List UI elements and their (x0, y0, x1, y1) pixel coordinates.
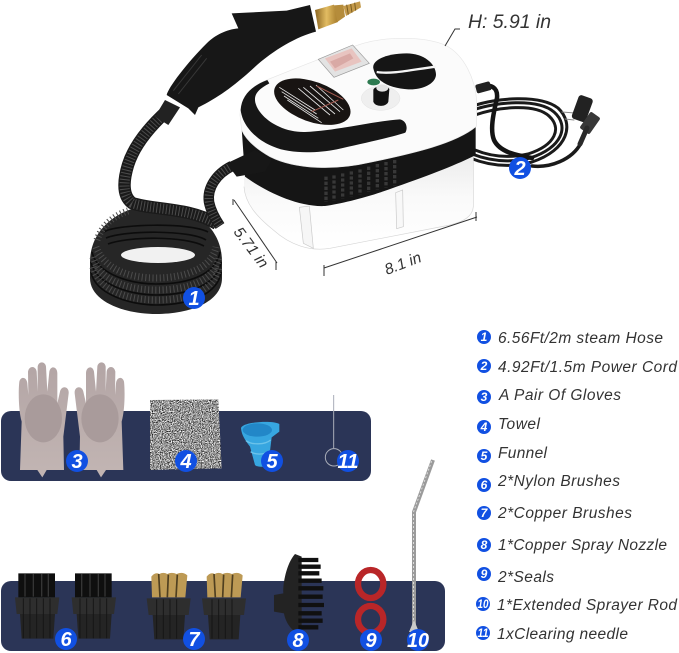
legend item 7: 2*Copper Brushes (497, 505, 632, 522)
icon: pair of gloves (19, 362, 125, 477)
icon: power cord and plug (470, 81, 601, 166)
legend item 9 (477, 567, 554, 586)
badge 6 (55, 628, 77, 651)
badge 4: 4 (179, 451, 192, 473)
badge 9 (360, 629, 382, 652)
badge 5 (261, 450, 283, 473)
badge 2: 2 (513, 158, 526, 180)
legend item 2: 2 (480, 359, 488, 373)
legend item 11: 1xClearing needle (497, 626, 628, 643)
icon: copper brushes (147, 573, 246, 639)
illustration: steamer unit (227, 38, 477, 249)
legend item 5: 5 (481, 449, 488, 463)
icon: spray nozzle brush (274, 554, 324, 633)
badge 7 (183, 628, 205, 651)
legend item 3: 3 (481, 390, 488, 404)
icon: vent slots (326, 160, 395, 202)
icon: coiled steam hose (90, 205, 222, 314)
legend item 6: 6 (481, 478, 488, 492)
icon: hose connector (227, 150, 272, 177)
badge 1 (183, 287, 205, 310)
legend item 2: 4.92Ft/1.5m Power Cord (498, 359, 678, 376)
icon: towel (150, 399, 222, 470)
width dimension: 8.1 in (382, 249, 424, 279)
icon: handle openings (373, 53, 436, 89)
legend item 7: 7 (481, 506, 489, 520)
legend item 9: 2*Seals (497, 569, 554, 586)
icon: power switch (318, 45, 369, 77)
badge 9: 9 (365, 630, 377, 652)
badge 1: 1 (188, 288, 200, 310)
badge 4 (175, 450, 197, 473)
icon: indicator light (367, 79, 380, 85)
legend item 8: 1*Copper Spray Nozzle (498, 537, 667, 554)
icon: extended sprayer rod (409, 460, 433, 632)
icon: black base band (242, 122, 476, 206)
badge 6: 6 (60, 629, 72, 651)
height dimension: H: 5.91 in (468, 12, 551, 33)
coil centre opening (121, 247, 195, 263)
badge 11: 11 (338, 451, 358, 473)
panel: accessories row two (1, 581, 445, 651)
icon: hose to handle (125, 110, 217, 224)
icon: clearing needle (325, 395, 343, 466)
legend item 1: 1 (481, 330, 488, 344)
legend item 10: 10 (478, 597, 489, 611)
badge 3: 3 (71, 451, 83, 473)
depth dimension (230, 199, 277, 272)
legend item 6: 2*Nylon Brushes (497, 473, 620, 490)
icon: water tank (244, 147, 473, 249)
badge 10: 10 (407, 630, 429, 652)
width dimension (324, 212, 477, 279)
icon: label plate (268, 69, 357, 134)
panel: accessories row one (1, 411, 371, 481)
depth dimension: 5.71 in (230, 224, 271, 272)
legend item 9: 9 (481, 567, 488, 581)
legend item 4: 4 (480, 420, 488, 434)
badge 2 (509, 157, 531, 180)
legend item 4: Towel (498, 416, 541, 433)
icon: funnel (241, 422, 279, 467)
badge 5: 5 (266, 451, 278, 473)
icon: white top shell (240, 38, 477, 168)
legend item 10: 1*Extended Sprayer Rod (497, 597, 678, 614)
legend item 8: 8 (481, 538, 488, 552)
legend item 1: 6.56Ft/2m steam Hose (498, 330, 663, 347)
legend item 5: Funnel (498, 445, 548, 462)
height dimension (445, 12, 551, 46)
icon: seals (358, 570, 383, 633)
badge 3 (66, 450, 88, 473)
icon: hose to steamer body (209, 166, 232, 226)
legend item 3: A Pair Of Gloves (498, 387, 621, 404)
legend item 11: 11 (478, 626, 489, 640)
badge 7: 7 (188, 629, 200, 651)
badge 8 (287, 629, 309, 652)
legend item 5 (477, 445, 548, 463)
badge 8: 8 (292, 630, 304, 652)
icon: temperature dial (361, 86, 400, 110)
icon: steam gun handle and brass nozzle (155, 1, 361, 125)
icon: nylon brushes (15, 573, 116, 639)
legend: item list (476, 330, 678, 643)
legend item 4 (477, 416, 541, 434)
icon: handle grip band (241, 80, 407, 152)
